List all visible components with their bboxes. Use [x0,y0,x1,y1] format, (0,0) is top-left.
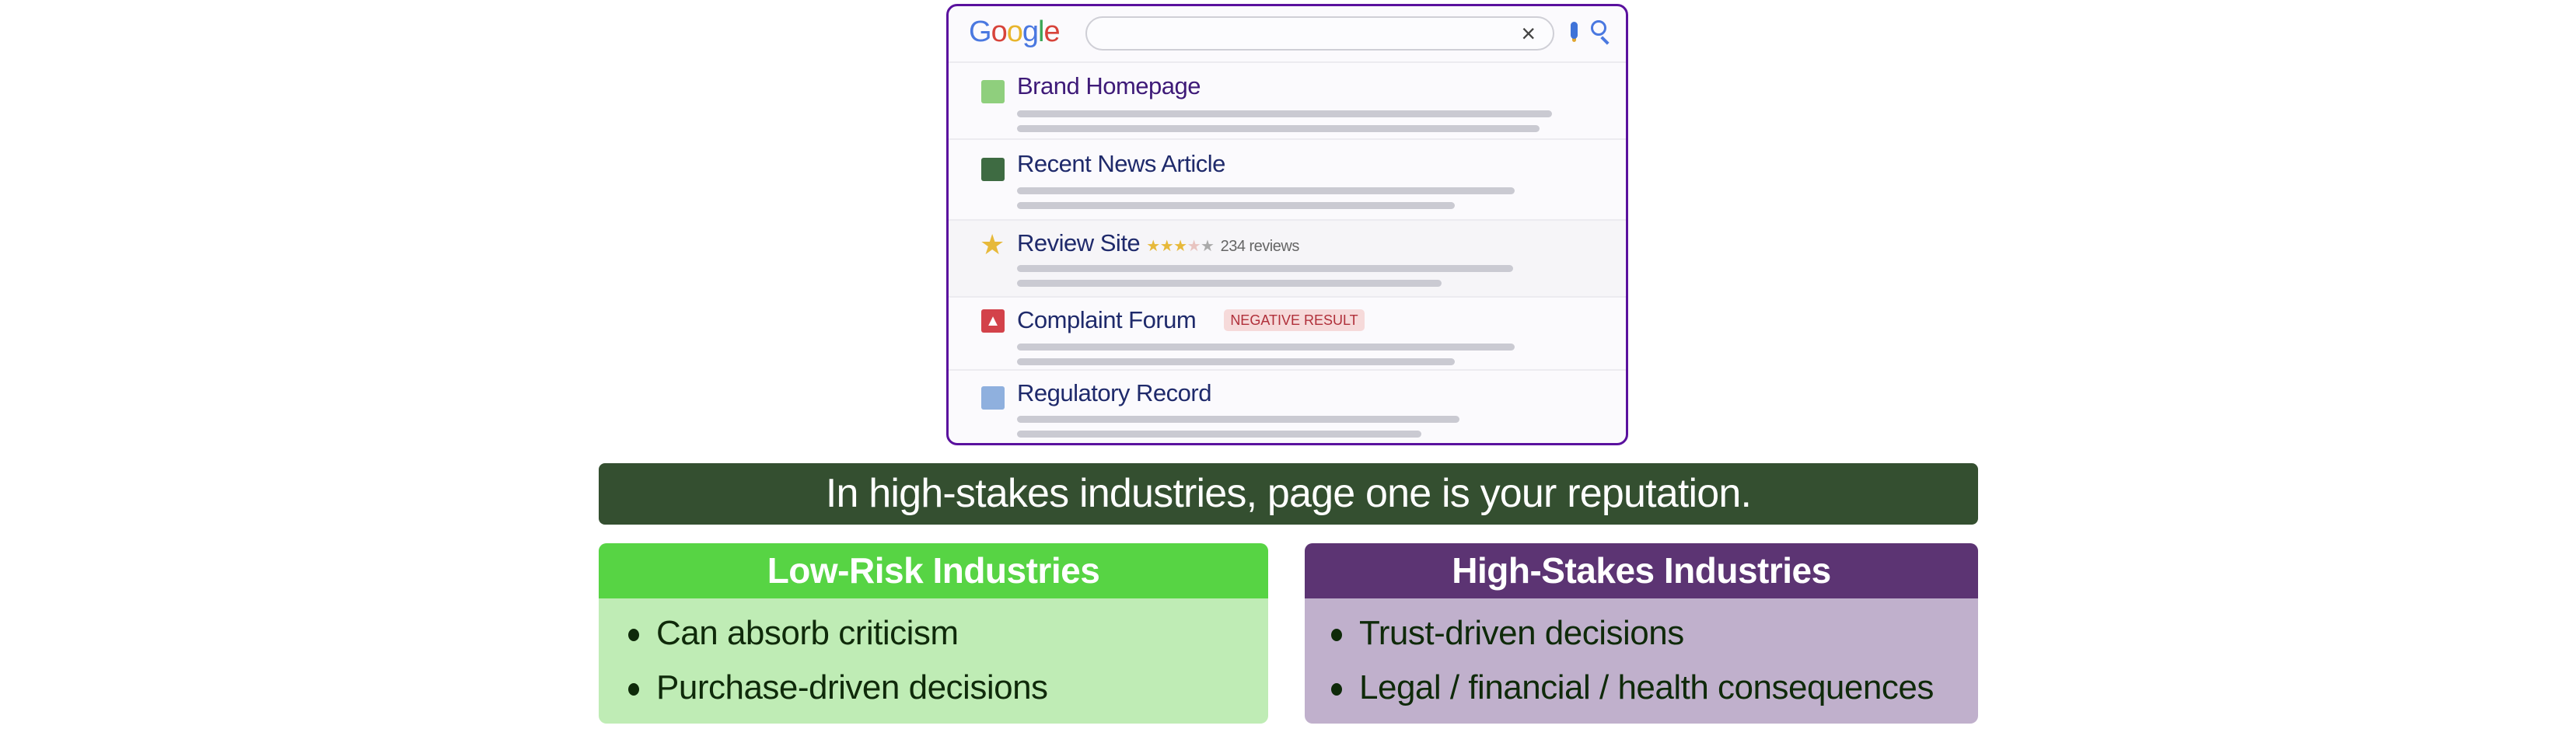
result: review site: Review Site ★★★★★ 234 reviews [1017,229,1299,256]
result: recent news article: Recent News Article [1017,150,1225,177]
result: review site [949,221,1625,296]
panel: low-risk industries [599,543,1268,724]
bullet list: Can absorb criticism [656,614,959,652]
result: recent news article [981,150,1515,209]
bullet list: Purchase-driven decisions [656,668,1048,706]
heading: low-risk: Low-Risk Industries [767,550,1099,591]
result: review site: ★ [980,228,1005,260]
result: complaint forum [981,306,1515,365]
result: regulatory record: Regulatory Record [1017,379,1211,406]
google logo: Google [969,16,1060,48]
result: complaint forum: Complaint Forum [1017,306,1196,333]
icon: mic [1571,22,1578,39]
search bar: × [1521,19,1536,47]
result: complaint forum: ▲ [985,312,1001,330]
search bar [1085,16,1554,51]
bullet list: Legal / financial / health consequences [1359,668,1934,706]
banner headline: In high-stakes industries, page one is your reputation. [826,471,1751,516]
bullet list: Trust-driven decisions [1359,614,1684,652]
search results mockup [946,4,1628,445]
banner headline [599,463,1978,525]
result: brand homepage: Brand Homepage [1017,72,1201,99]
result: brand homepage [981,72,1552,132]
icon: search [1591,20,1606,36]
panel: high-stakes industries [1305,543,1978,724]
heading: low-risk [599,543,1268,598]
heading: high-stakes [1305,543,1978,598]
badge: negative result [1224,309,1365,331]
bullet list [1331,614,1934,706]
heading: high-stakes: High-Stakes Industries [1452,550,1831,591]
result: regulatory record [981,379,1459,438]
badge: negative result: NEGATIVE RESULT [1230,312,1358,328]
bullet list [628,614,1048,706]
